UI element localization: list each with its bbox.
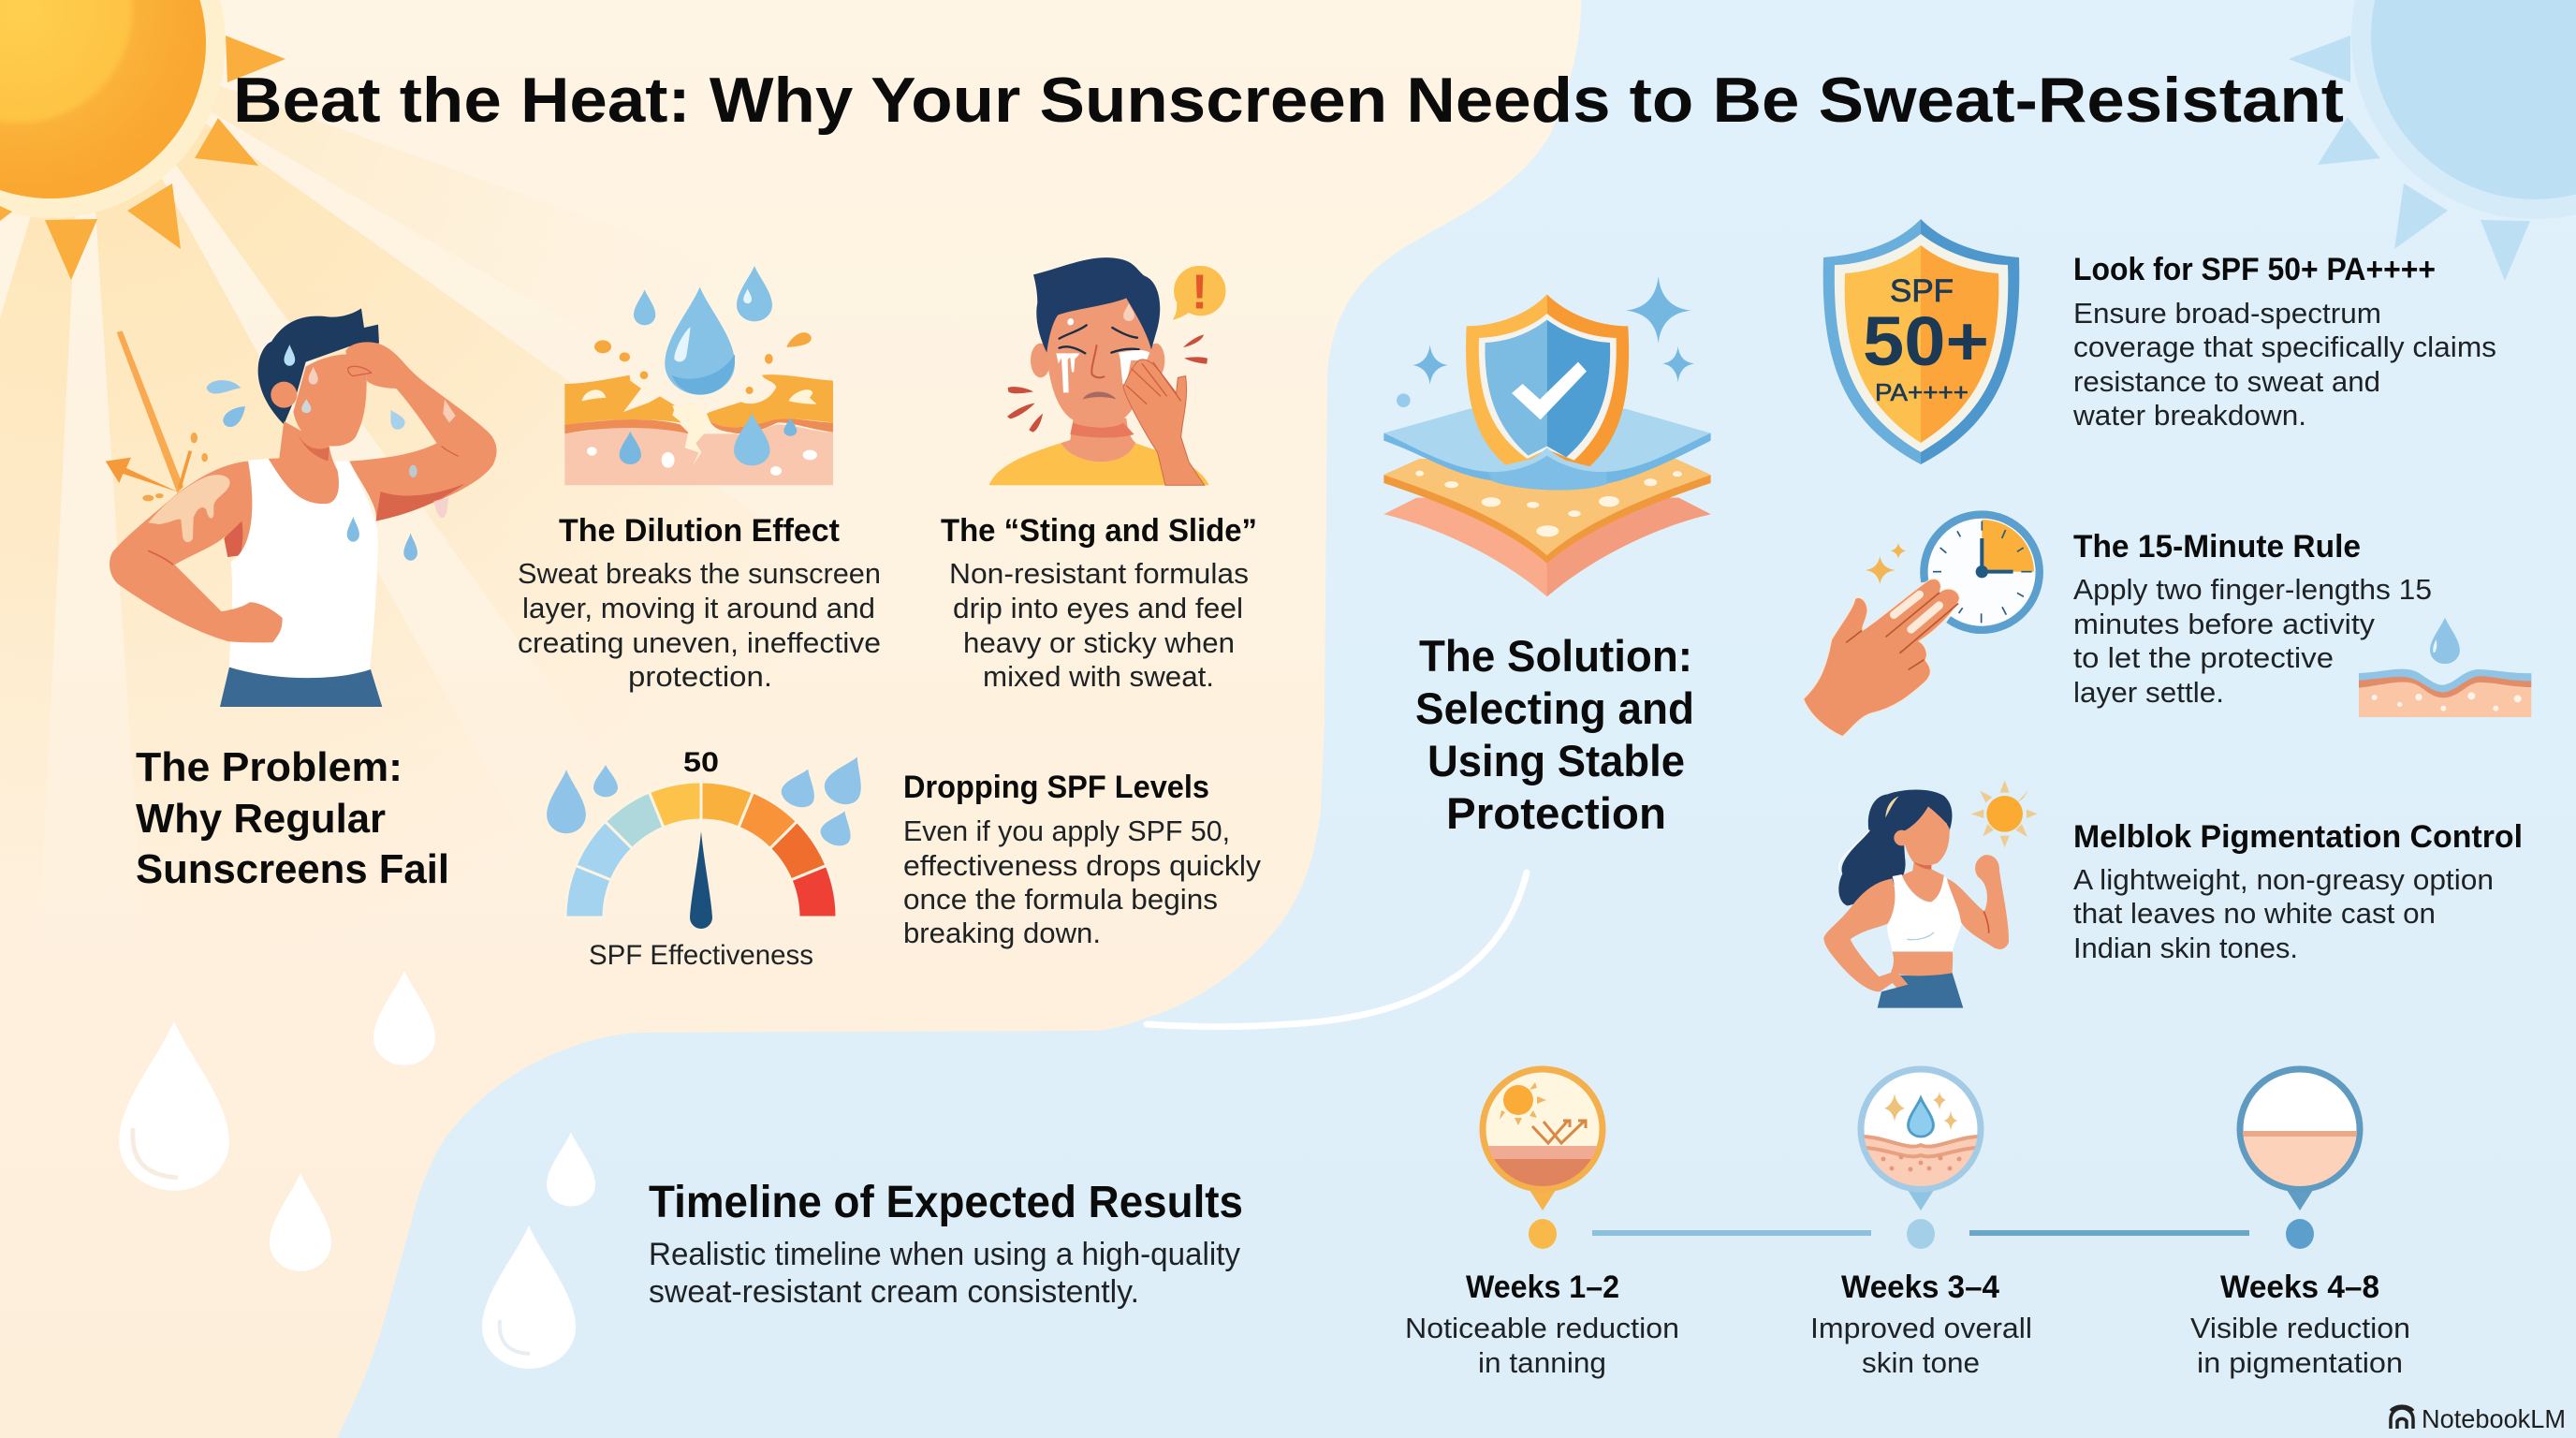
text: weeks 1-2 result: Noticeable reduction <box>1405 1312 1679 1344</box>
text: timeline intro: sweat-resistant cream consistently. <box>649 1274 1139 1310</box>
decorative sun top-left <box>0 0 285 280</box>
text: sting body: Non-resistant formulas <box>949 557 1249 590</box>
text: 15-minute body: to let the protective <box>2073 641 2334 674</box>
heading: the problem <box>136 744 449 892</box>
panel: the problem <box>106 257 1262 971</box>
text: weeks 4-8 result: Visible reduction <box>2190 1312 2410 1344</box>
icon: man wiping stinging eye: ! <box>1192 264 1208 318</box>
card: look for SPF 50+ <box>1823 219 2496 464</box>
heading: the solution: Selecting and <box>1415 683 1694 733</box>
text: weeks 4-8 result <box>2190 1312 2410 1379</box>
panel: the solution <box>1383 219 2531 1008</box>
text: sting body: heavy or sticky when <box>963 626 1235 659</box>
text: weeks 1-2 result: in tanning <box>1478 1346 1606 1379</box>
heading: the sting and slide: The “Sting and Slide” <box>941 513 1257 549</box>
milestone: weeks 4-8 <box>2190 1069 2410 1379</box>
text: SPF body: water breakdown. <box>2072 399 2306 432</box>
text: weeks 3-4 result: Improved overall <box>1810 1312 2032 1344</box>
timeline dot <box>1907 1219 1935 1249</box>
heading: the problem: Why Regular <box>136 796 386 842</box>
icon: SPF 50+ PA++++ shield: SPF <box>1890 273 1954 309</box>
text: SPF body: coverage that specifically claims <box>2073 330 2496 363</box>
gauge caption: SPF Effectiveness <box>589 940 813 971</box>
text: SPF body: resistance to sweat and <box>2073 365 2380 398</box>
text: weeks 1-2 result <box>1405 1312 1679 1379</box>
text: dropping SPF body: effectiveness drops quickly <box>903 849 1262 882</box>
text: weeks 3-4 result: skin tone <box>1862 1346 1980 1379</box>
timeline dot <box>1529 1219 1557 1249</box>
gauge droplets <box>547 749 874 850</box>
gauge top value: 50 <box>683 747 719 778</box>
text: dropping SPF body: breaking down. <box>903 917 1101 949</box>
card: melblok pigmentation control <box>1823 780 2523 1008</box>
heading: the problem: The Problem: <box>136 744 402 790</box>
text: SPF body: Ensure broad-spectrum <box>2073 297 2381 330</box>
icon: SPF 50+ PA++++ shield: 50+ <box>1863 302 1989 380</box>
text: weeks 3-4 result <box>1810 1312 2032 1379</box>
card: dropping SPF levels <box>547 747 1262 971</box>
gauge: SPF effectiveness <box>547 747 874 971</box>
illustration: shield over skin layers <box>1383 276 1711 596</box>
text: dropping SPF body <box>903 814 1262 949</box>
illustration: sweating man with sunscreen running <box>106 308 497 707</box>
card: the sting and slide <box>941 257 1257 693</box>
white connector curve <box>1147 873 1527 1027</box>
text: 15-minute body: Apply two finger-lengths 15 <box>2073 573 2432 606</box>
faint white water drops <box>119 971 595 1369</box>
text: dilution body: protection. <box>628 660 772 693</box>
text: dropping SPF body: Even if you apply SPF 50, <box>903 814 1230 847</box>
title: Beat the Heat: Why Your Sunscreen Needs to Be Sweat-Resistant <box>233 65 2344 136</box>
text: dilution body <box>518 557 881 693</box>
card: the dilution effect <box>518 266 881 693</box>
sun rays <box>0 37 1484 1030</box>
text: melblok body: Indian skin tones. <box>2073 932 2298 964</box>
heading: the dilution effect: The Dilution Effect <box>559 513 840 549</box>
icon: two fingers at clock <box>1804 515 2040 737</box>
milestone: weeks 3-4 <box>1810 1069 2032 1379</box>
heading: melblok: Melblok Pigmentation Control <box>2073 819 2523 855</box>
decorative pale sun top-right <box>2289 0 2576 281</box>
watermark: NotebookLM: NotebookLM <box>2422 1404 2566 1433</box>
label: weeks 4-8: Weeks 4–8 <box>2220 1269 2379 1305</box>
panel: timeline of expected results <box>649 1069 2410 1379</box>
heading: the solution: Using Stable <box>1427 736 1685 785</box>
text: 15-minute body: layer settle. <box>2073 676 2224 709</box>
heading: dropping SPF levels: Dropping SPF Levels <box>903 770 1209 805</box>
text: sting body: mixed with sweat. <box>983 660 1214 693</box>
text: 15-minute body <box>2073 573 2432 709</box>
text: melblok body: that leaves no white cast on <box>2073 897 2436 930</box>
text: timeline intro <box>649 1237 1240 1310</box>
pin icon: sun and tanning <box>1477 1069 1608 1211</box>
heading: the problem: Sunscreens Fail <box>136 846 449 892</box>
text: weeks 4-8 result: in pigmentation <box>2197 1346 2403 1379</box>
icon: water drops breaking sunscreen layer <box>564 266 833 485</box>
text: dilution body: Sweat breaks the sunscreen <box>518 557 881 590</box>
text: dropping SPF body: once the formula begins <box>903 883 1218 916</box>
heading: the 15-minute rule: The 15-Minute Rule <box>2073 529 2361 565</box>
pin icon: clear skin <box>2234 1069 2365 1211</box>
text: 15-minute body: minutes before activity <box>2073 608 2376 640</box>
card: the 15-minute rule <box>1804 515 2531 737</box>
label: weeks 1-2: Weeks 1–2 <box>1466 1269 1619 1305</box>
text: melblok body: A lightweight, non-greasy option <box>2073 863 2494 896</box>
icon: man wiping stinging eye <box>989 257 1226 485</box>
text: sting body <box>949 557 1249 693</box>
text: timeline intro: Realistic timeline when using a high-quality <box>649 1237 1240 1272</box>
milestone: weeks 1-2 <box>1405 1069 1679 1379</box>
icon: drop on skin layer <box>2359 618 2531 717</box>
timeline connector lines <box>1592 1230 2249 1236</box>
label: weeks 3-4: Weeks 3–4 <box>1841 1269 1999 1305</box>
text: melblok body <box>2073 863 2494 964</box>
icon: SPF 50+ PA++++ shield <box>1823 219 2019 464</box>
pin icon: hydrated skin <box>1855 1069 1986 1211</box>
heading: look for SPF: Look for SPF 50+ PA++++ <box>2073 252 2436 287</box>
heading: the solution <box>1415 631 1694 838</box>
icon: woman flexing with sun <box>1823 780 2038 1008</box>
text: SPF body <box>2072 297 2496 432</box>
timeline dot <box>2286 1219 2314 1249</box>
heading: timeline: Timeline of Expected Results <box>649 1178 1243 1227</box>
text: dilution body: creating uneven, ineffective <box>518 626 881 659</box>
text: sting body: drip into eyes and feel <box>953 592 1243 624</box>
heading: the solution: The Solution: <box>1419 631 1692 681</box>
gauge needle <box>690 831 712 929</box>
text: dilution body: layer, moving it around and <box>522 592 875 624</box>
heading: the solution: Protection <box>1446 788 1666 838</box>
icon: SPF 50+ PA++++ shield: PA++++ <box>1875 378 1969 406</box>
